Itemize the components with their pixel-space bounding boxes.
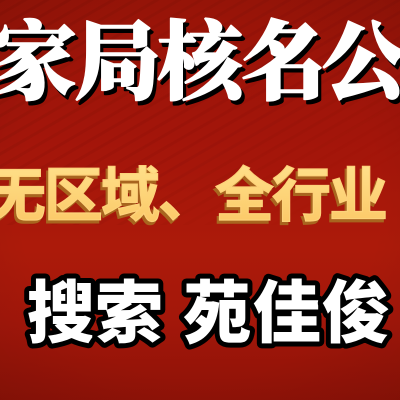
call to action: white text with thick black outline: 搜索苑佳俊 xyxy=(27,276,390,352)
